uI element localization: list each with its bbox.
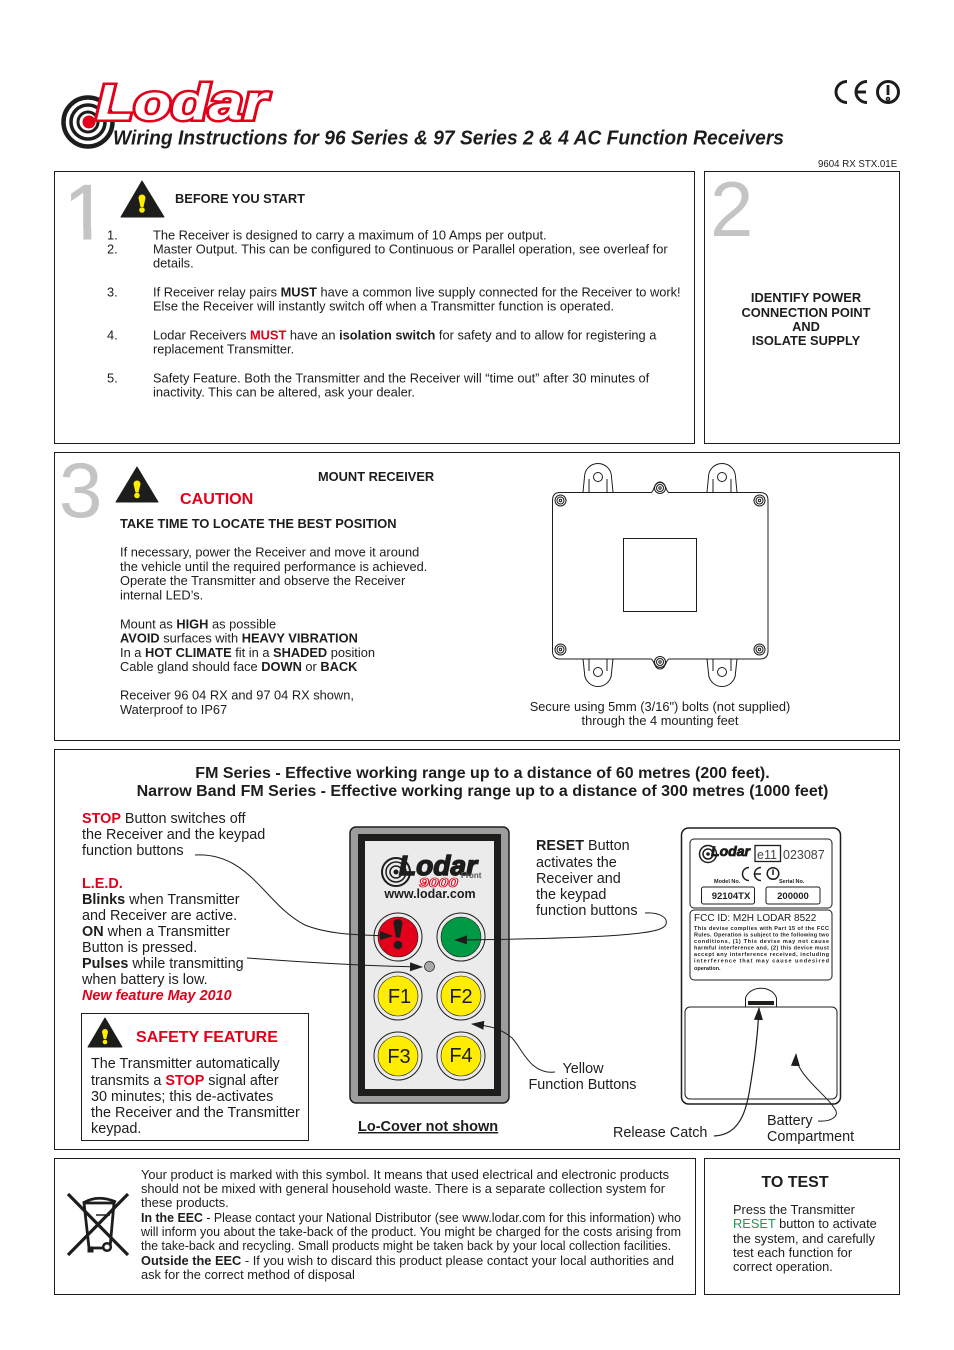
safety text: 30 minutes; this de-activates <box>91 1089 273 1105</box>
mounting instructions: Mount as HIGH as possible <box>120 616 276 632</box>
stop note: STOP Button switches off <box>82 811 246 827</box>
stop note: function buttons <box>82 843 184 859</box>
title: Wiring Instructions for 96 Series & 97 Series 2 & 4 AC Function Receivers <box>113 128 784 150</box>
reset note: the keypad <box>536 887 606 903</box>
test instructions: the system, and carefully <box>733 1231 875 1246</box>
mounting instructions: Cable gland should face DOWN or BACK <box>120 659 358 674</box>
icon: target logo <box>64 98 112 146</box>
disposal text: should not be mixed with general household waste. There is a separate collection system for <box>141 1181 666 1196</box>
step number 3: 3 <box>59 446 102 534</box>
safety text: transmits a STOP signal after <box>91 1073 279 1089</box>
disposal text: In the EEC - Please contact your National Distributor (see www.lodar.com for this information) who <box>141 1210 681 1225</box>
numbered list: 2. <box>107 242 118 256</box>
test instructions: correct operation. <box>733 1259 833 1274</box>
icon: caution triangle <box>116 467 158 502</box>
disposal text: will inform you about the take-back of the product. You might be charged for the costs arising from <box>140 1224 681 1239</box>
stop note: the Receiver and the keypad <box>82 827 265 843</box>
mounting instructions: Waterproof to IP67 <box>120 702 227 717</box>
label panel: 92104TX <box>712 891 751 902</box>
mounting instructions: Receiver 96 04 RX and 97 04 RX shown, <box>120 688 354 702</box>
led note: Button is pressed. <box>82 940 197 956</box>
fcc panel: harmful interference and, (2) this device must <box>694 946 829 952</box>
mounting caption <box>530 699 790 728</box>
fcc panel: Rules. Operation is subject to the following two <box>694 932 830 938</box>
numbered list: 1. <box>107 228 118 242</box>
led <box>424 962 434 972</box>
icon: crossed-out bin <box>68 1194 128 1255</box>
disposal text <box>140 1167 681 1282</box>
label panel: 023087 <box>783 848 825 862</box>
test instructions: Press the Transmitter <box>733 1202 856 1217</box>
test instructions: test each function for <box>733 1245 853 1260</box>
remote logo <box>382 850 482 901</box>
fcc panel: conditions, (1) This devise may not cause <box>694 939 829 945</box>
arrow: led <box>247 958 422 967</box>
arrow: stop <box>195 855 392 936</box>
mounting instructions: the vehicle until the required performance is achieved. <box>120 559 427 574</box>
mounting instructions: AVOID surfaces with HEAVY VIBRATION <box>120 630 358 646</box>
numbered list: Else the Receiver will instantly switch off when a Transmitter function is operated. <box>153 298 614 314</box>
arrow: battery <box>796 1054 836 1121</box>
fcc panel <box>690 910 832 980</box>
remote transmitter <box>350 827 509 1103</box>
mounting caption: through the 4 mounting feet <box>582 713 739 728</box>
instruction: CONNECTION POINT <box>742 305 871 320</box>
mounting instructions: If necessary, power the Receiver and move it around <box>120 544 419 560</box>
release catch <box>746 988 776 1007</box>
step number 2: 2 <box>710 165 753 253</box>
numbered list: details. <box>153 256 194 270</box>
panel: transmitter <box>54 750 900 1150</box>
numbered list: Lodar Receivers MUST have an isolation switch for safety and to allow for registering a <box>153 328 657 342</box>
fcc panel: This devise complies with Part 15 of the FCC <box>694 926 829 932</box>
heading: TO TEST <box>761 1174 829 1191</box>
disposal text: Outside the EEC - If you wish to discard this product please contact your local authorities and <box>141 1253 674 1268</box>
numbered list: If Receiver relay pairs MUST have a common live supply connected for the Receiver to work! <box>153 284 681 300</box>
numbered list: replacement Transmitter. <box>153 342 294 356</box>
fcc panel: accept any interference received, including <box>694 952 829 958</box>
mounting instructions <box>120 516 427 717</box>
mounting instructions: In a HOT CLIMATE fit in a SHADED position <box>120 645 375 660</box>
function buttons: F2 <box>449 986 473 1008</box>
panel: to test <box>704 1158 900 1294</box>
mounting caption: Secure using 5mm (3/16") bolts (not supplied) <box>530 699 790 714</box>
panel: disposal <box>54 1158 696 1294</box>
safety feature box <box>82 1014 308 1140</box>
panel: mount receiver <box>54 446 900 740</box>
function buttons: F4 <box>449 1045 473 1067</box>
stop button <box>374 913 422 961</box>
icon: warning triangle <box>121 181 164 217</box>
fcc panel: interference that may cause undesired <box>694 958 829 964</box>
led note <box>81 876 244 1004</box>
reset note: activates the <box>536 855 617 871</box>
led note: Blinks when Transmitter <box>82 892 240 908</box>
label panel: Lodar <box>711 843 752 859</box>
instruction: IDENTIFY POWER <box>751 290 861 305</box>
remote logo: Lodar <box>399 850 479 881</box>
mounting instructions: internal LED’s. <box>120 588 203 602</box>
function buttons label: Function Buttons <box>528 1077 636 1093</box>
numbered list: 5. <box>107 370 118 386</box>
document code: 9604 RX STX.01E <box>818 159 898 170</box>
reset note <box>536 838 638 919</box>
battery label: Battery <box>767 1113 813 1129</box>
battery compartment <box>685 1007 837 1099</box>
logo wordmark: Lodar <box>96 74 270 130</box>
reset note: RESET Button <box>536 838 630 854</box>
caution label: CAUTION <box>180 490 253 508</box>
mounting instructions: Operate the Transmitter and observe the Receiver <box>120 573 406 588</box>
instruction: AND <box>792 319 820 334</box>
heading: MOUNT RECEIVER <box>318 469 434 484</box>
function buttons: F3 <box>387 1046 411 1068</box>
function buttons <box>374 972 485 1080</box>
arrow: function buttons <box>472 1024 555 1072</box>
numbered list: inactivity. This can be altered, ask your dealer. <box>153 384 415 400</box>
safety text: The Transmitter automatically <box>91 1056 281 1072</box>
release catch label: Release Catch <box>613 1125 707 1141</box>
receiver diagram <box>552 463 768 686</box>
led note: when battery is low. <box>81 972 208 988</box>
function buttons: F1 <box>388 986 411 1008</box>
reset button <box>437 913 485 961</box>
fcc panel: operation. <box>694 966 721 972</box>
disposal text: these products. <box>141 1195 229 1210</box>
stop note <box>82 811 265 859</box>
range heading: FM Series - Effective working range up to a distance of 60 metres (200 feet). <box>195 765 770 782</box>
range heading: Narrow Band FM Series - Effective working range up to a distance of 300 metres (1000 feet) <box>137 783 828 800</box>
step number 1 <box>71 184 92 240</box>
reset note: function buttons <box>536 903 638 919</box>
function buttons label <box>528 1061 636 1093</box>
disposal text: Your product is marked with this symbol. It means that used electrical and electronic products <box>141 1167 669 1182</box>
fcc panel: FCC ID: M2H LODAR 8522 <box>694 913 817 924</box>
label panel: Serial No. <box>779 879 805 885</box>
disposal text: ask for the correct method of disposal <box>141 1267 355 1282</box>
led note: ON when a Transmitter <box>82 924 230 940</box>
remote logo: 9000 <box>419 875 459 890</box>
safety text: keypad. <box>91 1121 141 1137</box>
label panel: 200000 <box>777 891 809 902</box>
numbered list: Master Output. This can be configured to Continuous or Parallel operation, see overleaf for <box>153 242 668 256</box>
safety heading: SAFETY FEATURE <box>136 1028 278 1046</box>
led note: New feature May 2010 <box>82 988 232 1004</box>
test instructions <box>733 1202 877 1274</box>
label panel: Model No. <box>714 879 741 885</box>
safety text <box>91 1056 300 1137</box>
header <box>64 74 898 170</box>
led note: Pulses while transmitting <box>82 956 244 972</box>
disposal text: the take-back and recycling. Small products might be taken back by your local collection facilities. <box>141 1238 671 1253</box>
numbered list: 4. <box>107 328 118 342</box>
numbered list: Safety Feature. Both the Transmitter and the Receiver will “time out” after 30 minutes of <box>153 370 650 386</box>
instruction: ISOLATE SUPPLY <box>752 333 861 348</box>
arrow: release catch <box>714 1008 759 1136</box>
remote logo: Front <box>461 871 482 880</box>
battery label: Compartment <box>767 1129 854 1145</box>
range heading <box>137 765 828 800</box>
heading: BEFORE YOU START <box>175 191 305 206</box>
battery label <box>767 1113 854 1145</box>
test instructions: RESET button to activate <box>733 1216 877 1231</box>
function buttons label: Yellow <box>562 1061 604 1077</box>
receiver back view <box>682 828 840 1104</box>
label panel: e11 <box>757 848 777 862</box>
led note: and Receiver are active. <box>82 908 237 924</box>
step number 1: 1 <box>64 168 107 256</box>
icon: CE alert marks <box>836 82 898 102</box>
numbered list <box>107 228 681 400</box>
led note: L.E.D. <box>82 876 123 892</box>
instruction <box>742 290 871 348</box>
reset note: Receiver and <box>536 871 621 887</box>
remote logo: www.lodar.com <box>383 887 476 901</box>
panel: identify power <box>704 165 900 444</box>
mounting instructions: TAKE TIME TO LOCATE THE BEST POSITION <box>120 516 397 531</box>
arrow: reset <box>455 913 666 940</box>
numbered list: The Receiver is designed to carry a maximum of 10 Amps per output. <box>153 228 547 242</box>
icon: safety triangle <box>88 1018 122 1047</box>
label panel <box>690 839 832 908</box>
numbered list: 3. <box>107 284 118 300</box>
safety text: the Receiver and the Transmitter <box>91 1105 300 1121</box>
panel: before you start <box>54 168 694 444</box>
lo-cover note: Lo-Cover not shown <box>358 1119 498 1135</box>
